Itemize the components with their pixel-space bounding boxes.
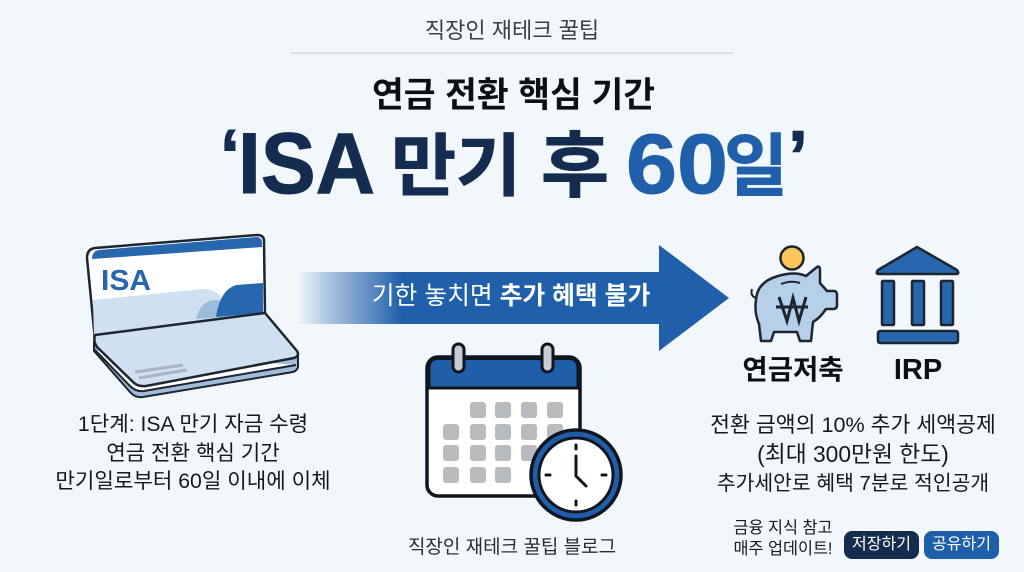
text: step 1 description: 만기일로부터 60일 이내에 이체 — [55, 470, 331, 493]
text: step 1 description: 연금 전환 핵심 기간 — [106, 442, 280, 464]
icon: bank building — [877, 247, 958, 343]
headline: ISA — [238, 116, 375, 212]
text: benefit description: 전환 금액의 10% 추가 세액공제 — [710, 412, 996, 437]
laptop title bar — [92, 237, 262, 259]
laptop screen shapes — [93, 289, 225, 337]
laptop base — [94, 342, 298, 397]
text: step 1 description: 1단계: ISA 만기 자금 수령 — [78, 413, 308, 436]
text: update note: 금융 지식 참고 — [734, 519, 832, 537]
headline: 60 — [626, 117, 728, 211]
icon: piggy bank — [752, 246, 837, 341]
text: update note — [734, 519, 832, 558]
heading line: 연금 전환 핵심 기간 — [372, 76, 655, 115]
top label: 직장인 재테크 꿀팁 — [425, 18, 599, 43]
headline: 일 — [724, 129, 788, 205]
button: save — [844, 531, 919, 559]
arrow — [298, 245, 729, 351]
text: benefit description: (최대 300만원 한도) — [757, 440, 949, 466]
text: update note: 매주 업데이트! — [734, 540, 832, 558]
laptop back panel — [87, 235, 265, 340]
text: blog caption: 직장인 재테크 꿀팁 블로그 — [408, 537, 616, 558]
headline: 만기 — [391, 129, 521, 205]
button: save: 저장하기 — [852, 536, 911, 553]
headline: 후 — [541, 127, 609, 207]
text: ISA on laptop: ISA — [101, 265, 151, 297]
button: share — [924, 531, 999, 559]
headline: ’ — [788, 117, 808, 197]
text: benefit description — [710, 412, 996, 495]
arrow label: 기한 놓치면 추가 혜택 불가 — [372, 283, 650, 310]
button: share: 공유하기 — [932, 536, 991, 553]
label: IRP: IRP — [894, 354, 942, 386]
text: step 1 description — [55, 413, 331, 493]
text: benefit description: 추가세안로 혜택 7분로 적인공개 — [717, 473, 989, 495]
icon: laptop ISA — [87, 235, 298, 397]
label: 연금저축: 연금저축 — [742, 354, 844, 385]
headline: ‘ — [220, 116, 240, 196]
headline — [220, 116, 808, 212]
icon: calendar with clock — [427, 344, 621, 520]
